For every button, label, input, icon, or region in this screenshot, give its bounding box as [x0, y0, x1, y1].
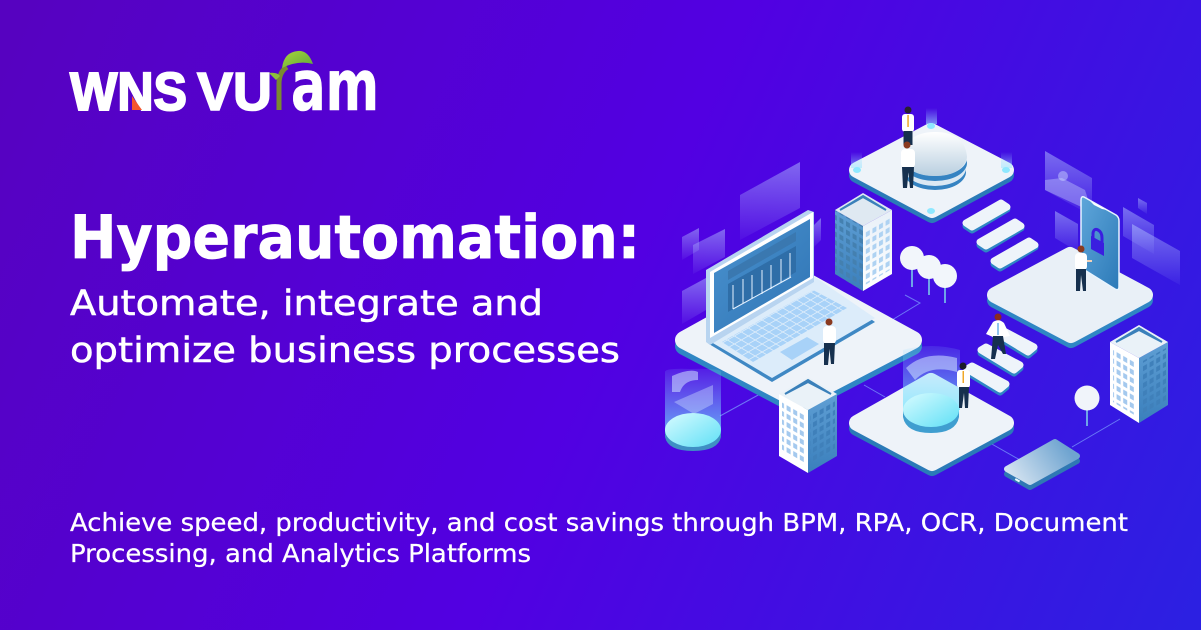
connector lines — [720, 295, 1120, 460]
building: upper — [835, 193, 892, 291]
cylinder left with glass — [665, 369, 721, 451]
logo plant stem and leaves — [269, 51, 313, 110]
subtitle: Automate, integrate and — [70, 284, 543, 324]
storage device — [1007, 442, 1077, 487]
building: right — [1110, 325, 1168, 423]
title: Hyperautomation: — [70, 203, 640, 273]
person standing by database — [901, 142, 915, 188]
logo wordmark VU: VU — [197, 62, 272, 122]
phone with padlock — [1081, 197, 1119, 290]
floating translucent panels — [682, 151, 1180, 324]
isometric automation illustration — [665, 106, 1180, 487]
logo wordmark am: am — [291, 45, 379, 127]
trees — [900, 246, 957, 303]
lower stairs — [967, 329, 1034, 392]
phone notch — [1090, 201, 1107, 210]
platform: database — [851, 106, 1012, 215]
platform: security — [995, 197, 1145, 340]
subtitle — [70, 284, 620, 371]
tree: right — [1074, 386, 1100, 426]
logo accent triangle — [132, 96, 142, 110]
person with tie beside cylinder — [957, 362, 970, 408]
logo wordmark WNS: WNS — [70, 62, 187, 122]
description text — [70, 508, 1128, 568]
person walking on stairs — [986, 314, 1010, 359]
description text: Achieve speed, productivity, and cost savings through BPM, RPA, OCR, Document — [70, 508, 1128, 537]
bar chart on screen — [733, 253, 791, 309]
description text: Processing, and Analytics Platforms — [70, 539, 531, 568]
person on laptop platform — [823, 318, 836, 365]
keyboard — [722, 290, 847, 362]
building: lower left — [779, 377, 837, 473]
platform: laptop — [684, 210, 913, 406]
glowing corner nodes — [851, 108, 1012, 214]
database stack — [903, 132, 967, 190]
person at phone — [1075, 246, 1092, 291]
upper stairs — [966, 203, 1035, 268]
laptop screen — [706, 210, 814, 345]
padlock icon — [1091, 229, 1104, 256]
laptop — [706, 210, 875, 382]
person in white shirt with tie — [902, 106, 914, 145]
glass cylinder — [903, 346, 960, 433]
trackpad — [780, 337, 819, 360]
subtitle: optimize business processes — [70, 331, 620, 371]
platform: glass cylinder — [857, 346, 1006, 468]
logo: WNS Vuram — [70, 45, 379, 127]
